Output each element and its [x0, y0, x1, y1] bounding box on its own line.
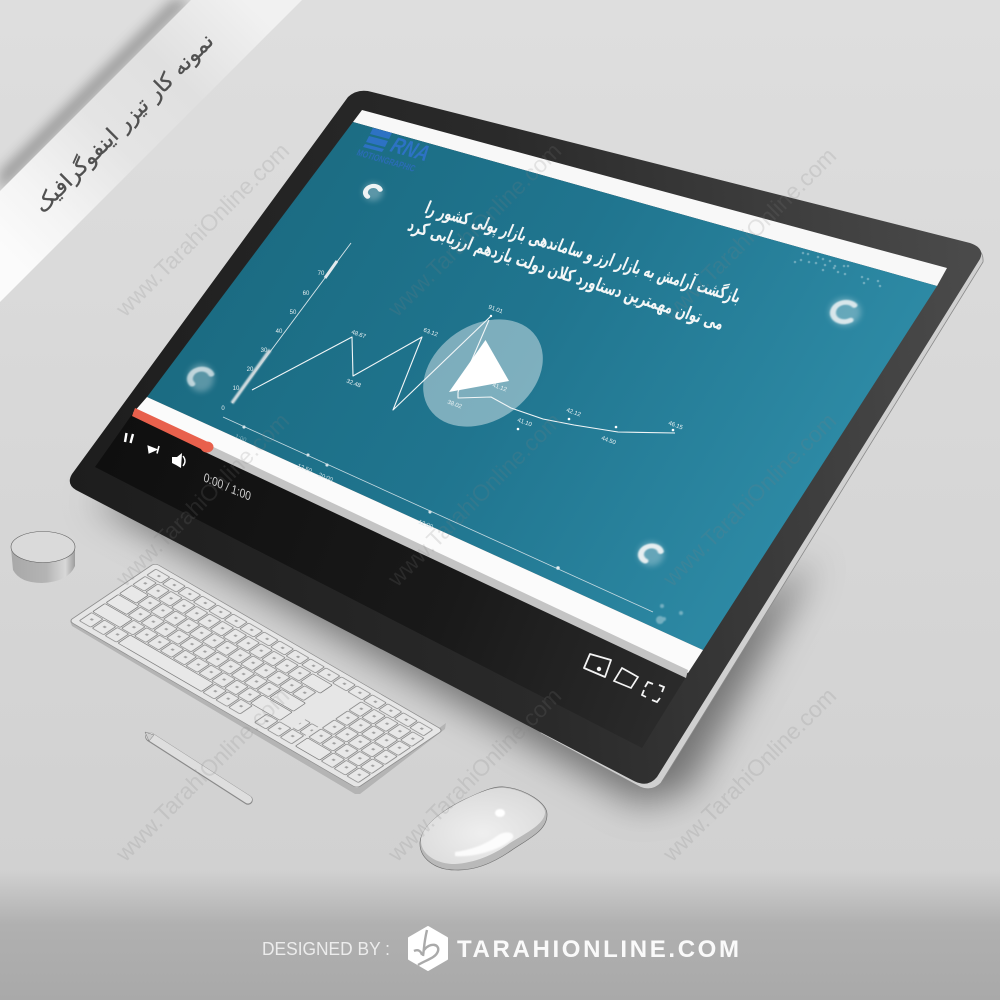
chart [221, 243, 684, 612]
icon: pause [125, 433, 133, 443]
keyboard [69, 563, 446, 794]
corner ribbon [0, 0, 302, 302]
keyboard body [69, 563, 443, 788]
x axis [223, 417, 653, 612]
watermarks: www.TarahiOnline.com [657, 407, 841, 592]
ring glows [188, 183, 861, 566]
buffer line [205, 444, 688, 678]
data line [252, 316, 491, 410]
x axis labels: 1:00 [234, 434, 248, 444]
silver edge [540, 246, 983, 789]
watermarks: www.TarahiOnline.com [382, 682, 566, 867]
data labels: 41.10 [516, 418, 533, 429]
headline text: می توان مهمترین دستاورد کلان دولت یازدهم ارزیابی کرد [404, 215, 727, 335]
progress bar [132, 408, 214, 452]
top white strip [353, 110, 947, 286]
y axis labels: 30 [261, 348, 268, 354]
headline text: بازگشت آرامش به بازار ارز و ساماندهی بازار پولی کشور را [422, 196, 745, 308]
data labels: 41.12 [491, 383, 508, 394]
teal screen [147, 122, 937, 650]
headline text [404, 196, 745, 335]
keyboard edge [70, 621, 446, 794]
bottom white strip [133, 397, 703, 673]
x axis labels: 20:00 [317, 472, 334, 484]
y axis labels: 0 [221, 406, 225, 412]
watermarks: www.TarahiOnline.com [110, 137, 294, 322]
key rows [78, 576, 425, 783]
data labels: 63.12 [422, 328, 439, 339]
y axis labels: 50 [290, 310, 297, 316]
monitor shadow [90, 470, 815, 805]
data labels: 44.50 [600, 436, 617, 447]
icon: logo hexagon [409, 927, 447, 970]
watermarks: www.TarahiOnline.com [110, 407, 294, 592]
icon: mini player [584, 654, 611, 677]
monitor frame [70, 91, 981, 784]
data labels: 42.12 [565, 408, 582, 419]
play circle [401, 308, 565, 438]
x axis labels: 12:00 [417, 519, 434, 531]
video control bar [95, 413, 686, 748]
watermarks: www.TarahiOnline.com [382, 137, 566, 322]
y axis labels: 70 [318, 271, 325, 277]
logo: IRNA: RNA [387, 132, 434, 166]
icon: next [148, 446, 159, 454]
play triangle [449, 340, 509, 392]
data labels: 48.67 [350, 330, 367, 341]
x axis labels: 12.50 [296, 463, 313, 475]
designed by label: DESIGNED BY : [262, 938, 390, 959]
y axis labels: 40 [276, 329, 283, 335]
watermarks: www.TarahiOnline.com [382, 407, 566, 592]
time code: 0:00 / 1:00 [202, 470, 252, 504]
y axis labels: 20 [247, 367, 254, 373]
y axis labels [221, 271, 325, 412]
data labels [345, 305, 684, 447]
data labels: 32.48 [345, 379, 362, 390]
y axis labels: 60 [303, 291, 310, 297]
data labels: 38.02 [446, 400, 463, 411]
y axis [232, 243, 351, 403]
speckle glow [656, 604, 683, 624]
pen [145, 732, 248, 800]
watermarks: www.TarahiOnline.com [657, 682, 841, 867]
function keys [146, 568, 434, 737]
ribbon text: نمونه کار تیزر اینفوگرافیک [30, 29, 218, 217]
watermarks [110, 137, 841, 867]
dial [11, 532, 75, 583]
logo: IRNA [355, 128, 434, 175]
x axis labels [234, 434, 434, 531]
dot decorations [794, 252, 881, 287]
data labels: 91.01 [487, 305, 504, 316]
monitor [70, 91, 983, 789]
brand name: TARAHIONLINE.COM [457, 936, 739, 963]
data labels: 46.15 [667, 421, 684, 432]
icon: volume [172, 453, 185, 468]
logo: IRNA: MOTIONGRAPHIC [355, 148, 417, 175]
watermarks: www.TarahiOnline.com [110, 682, 294, 867]
footer credit [262, 927, 739, 970]
mouse [420, 787, 547, 870]
data points [490, 315, 674, 431]
y axis labels: 10 [233, 386, 240, 392]
watermarks: www.TarahiOnline.com [657, 142, 841, 327]
icon: fullscreen [642, 682, 664, 702]
icon: theater mode [614, 668, 638, 688]
glowing ring decorations [186, 184, 861, 564]
